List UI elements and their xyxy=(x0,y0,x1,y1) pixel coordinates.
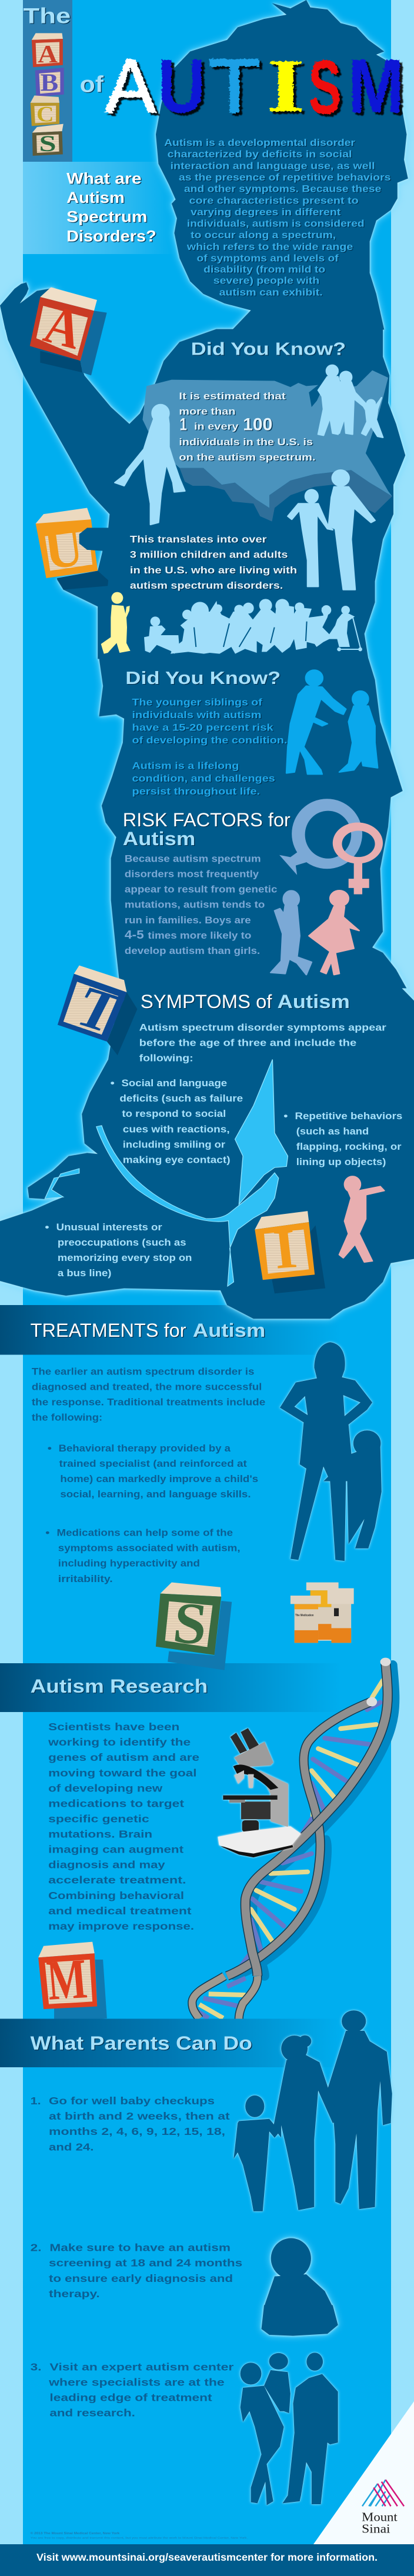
text: medications bullet: Medications can help some of the xyxy=(57,1527,233,1538)
silhouette: pink child xyxy=(339,1176,384,1262)
text: 3 million: autism spectrum disorders. xyxy=(130,580,283,590)
logo: Mount Sinai: Sinai xyxy=(362,2522,390,2535)
text: social and language bullet: • xyxy=(111,1077,115,1089)
text: social and language bullet: cues with reactions, xyxy=(123,1124,230,1134)
text: 1 in every 100: more than xyxy=(179,406,236,416)
text: behavioral therapy bullet: home) can markedly improve a child's xyxy=(60,1473,258,1484)
logo: Mount Sinai xyxy=(362,2480,404,2535)
title: The: The xyxy=(24,4,71,28)
silhouette: siblings xyxy=(286,670,378,774)
silhouette: woman kicking xyxy=(115,405,185,525)
text: siblings and lifelong condition: condition, and challenges xyxy=(132,773,275,784)
copyright text xyxy=(31,2531,248,2540)
text: behavioral therapy bullet: social, learning, and language skills. xyxy=(60,1489,251,1499)
text: symptoms intro: Autism spectrum disorder symptoms appear xyxy=(139,1022,386,1033)
icon: block M xyxy=(38,1942,107,2023)
text: step 2: to ensure early diagnosis and xyxy=(49,2273,233,2284)
block B small xyxy=(35,68,64,97)
text: research paragraph: and medical treatment xyxy=(48,1906,192,1917)
text: risk factors: develop autism than girls. xyxy=(125,945,260,956)
text: step 3 xyxy=(31,2361,233,2419)
heading: what are autism spectrum disorders: Autism xyxy=(66,189,125,206)
heading: what are autism spectrum disorders xyxy=(66,169,156,245)
question band xyxy=(23,162,176,254)
text: 3 million xyxy=(130,533,297,590)
text: research paragraph: genes of autism and are xyxy=(48,1752,199,1764)
text: medications bullet: including hyperactivity and xyxy=(58,1558,200,1569)
hand over block xyxy=(79,528,109,571)
text: 3 million: This translates into over xyxy=(130,533,266,545)
heading: risk factors xyxy=(123,809,291,849)
text: medications bullet: irritability. xyxy=(58,1573,113,1584)
block C small: C xyxy=(36,102,54,126)
icon: block M: M xyxy=(44,1947,89,2012)
child silhouette background xyxy=(0,0,414,1319)
icon: block T: T xyxy=(65,975,132,1045)
title: AUTISM: U xyxy=(158,44,205,129)
title side strip xyxy=(23,0,72,162)
text: autism definition: Autism is a developmental disorder xyxy=(164,137,355,148)
icon: US map xyxy=(142,371,392,522)
text: autism definition: of symptoms and levels of xyxy=(197,253,339,263)
block S small xyxy=(32,124,64,156)
text: step 1: at birth and 2 weeks, then at xyxy=(49,2111,230,2123)
text: step 2: therapy. xyxy=(49,2288,100,2300)
text: social and language bullet xyxy=(111,1077,243,1165)
text: research paragraph: moving toward the goal xyxy=(48,1767,197,1779)
text: risk factors: run in families. Boys are xyxy=(125,915,251,925)
text: unusual interests bullet: a bus line) xyxy=(58,1267,111,1279)
text: 1 in every 100: It is estimated that xyxy=(179,391,286,401)
text: risk factors: disorders most frequently xyxy=(125,869,259,879)
text: medications bullet: • xyxy=(45,1527,49,1538)
text: step 2: screening at 18 and 24 months xyxy=(49,2258,242,2269)
icon: large block A xyxy=(30,287,107,375)
text: step 3: Visit an expert autism center xyxy=(49,2361,233,2373)
silhouette: seated child xyxy=(262,2238,338,2336)
text: siblings and lifelong condition: The younger siblings of xyxy=(132,696,263,708)
silhouette: boy xyxy=(271,890,312,975)
text: autism definition: characterized by deficits in social xyxy=(168,149,352,159)
text: risk factors: mutations, autism tends to xyxy=(125,899,265,910)
text: repetitive behaviors bullet: flapping, rocking, or xyxy=(296,1141,401,1152)
block A small: A xyxy=(38,41,58,68)
text: research paragraph: medications to target xyxy=(48,1798,184,1810)
text: treatments intro: the response. Traditional treatments include xyxy=(32,1397,265,1407)
text: social and language bullet: making eye contact) xyxy=(123,1154,231,1165)
text: autism definition: disability (from mild to xyxy=(203,263,325,275)
icon: block S xyxy=(156,1583,232,1670)
text: step 1: 1. xyxy=(31,2095,41,2107)
logo mark xyxy=(362,2480,404,2506)
text: 3 million: 3 million children and adults xyxy=(130,549,288,560)
text: 1 in every 100 xyxy=(179,391,316,463)
text: unusual interests bullet: preoccupations (such as xyxy=(58,1237,186,1248)
icon: microscope xyxy=(218,1728,301,1857)
text: risk factors: appear to result from genetic xyxy=(125,884,277,895)
text: autism definition: as the presence of repetitive behaviors xyxy=(179,172,391,183)
text: behavioral therapy bullet: trained specialist (and reinforced at xyxy=(59,1458,247,1469)
logo corner triangle xyxy=(313,2401,414,2544)
text: symptoms intro xyxy=(139,1022,386,1063)
text: social and language bullet: deficits (such as failure xyxy=(119,1093,243,1104)
heading: symptoms: Autism xyxy=(277,990,350,1012)
text: treatments intro: diagnosed and treated, the more successful xyxy=(32,1382,262,1392)
icon: large block A: A xyxy=(38,293,88,361)
text: research paragraph: of developing new xyxy=(48,1783,162,1794)
title: AUTISM: A xyxy=(105,44,156,129)
text: research paragraph: Combining behavioral xyxy=(48,1890,184,1901)
text: research paragraph: diagnosis and may xyxy=(48,1860,165,1871)
icon: DNA helix xyxy=(227,1658,395,1976)
text: step 3: and research. xyxy=(49,2407,135,2419)
silhouette: mother and daughter xyxy=(280,1342,382,1561)
text: autism definition: severe) people with xyxy=(213,275,319,286)
icon: block U: U xyxy=(41,515,86,580)
text: autism definition: and other symptoms. Because these xyxy=(184,183,381,194)
heading: risk factors: Autism xyxy=(123,827,195,849)
text: autism definition: individuals, autism is considered xyxy=(187,218,365,229)
text: 1 in every 100: 100 xyxy=(243,415,272,434)
text: siblings and lifelong condition: individuals with autism xyxy=(132,709,262,720)
heading: what parents can do: What Parents Can Do xyxy=(31,2032,252,2054)
text: 1 in every 100: on the autism spectrum. xyxy=(179,452,316,463)
text: step 3: 3. xyxy=(31,2361,41,2373)
silhouette: family walking xyxy=(233,2010,392,2211)
heading: treatments: Autism xyxy=(193,1319,265,1341)
silhouette: couple and child xyxy=(241,2353,338,2505)
text: risk factors: 4-5 xyxy=(125,927,144,941)
text: research paragraph: may improve response. xyxy=(48,1921,194,1932)
icon: block I: I xyxy=(271,1216,300,1281)
heading: risk factors: RISK FACTORS for xyxy=(123,809,291,830)
light gaps in silhouette xyxy=(45,1059,288,1286)
text: step 1: and 24. xyxy=(49,2141,94,2153)
text: research paragraph: mutations. Brain xyxy=(48,1829,152,1840)
text: siblings and lifelong condition: Autism is a lifelong xyxy=(132,760,239,771)
text: risk factors: Because autism spectrum xyxy=(125,853,261,864)
text: repetitive behaviors bullet: Repetitive behaviors xyxy=(295,1110,402,1121)
silhouette: yellow boy xyxy=(101,592,131,654)
text: treatments intro: The earlier an autism spectrum disorder is xyxy=(32,1366,254,1377)
text: repetitive behaviors bullet: (such as hand xyxy=(296,1126,369,1136)
text: 1 in every 100: in every xyxy=(194,421,239,432)
logo: Mount Sinai: Mount xyxy=(362,2510,398,2524)
text: step 3: where specialists are at the xyxy=(48,2377,225,2388)
text: research paragraph: working to identify the xyxy=(48,1737,191,1749)
text: research paragraph: imaging can augment xyxy=(48,1844,183,1856)
text: medications bullet xyxy=(45,1527,241,1584)
text: social and language bullet: Social and language xyxy=(122,1077,227,1089)
text: repetitive behaviors bullet: lining up objects) xyxy=(296,1156,386,1167)
text: autism definition: core characteristics present to xyxy=(189,195,359,206)
text: risk factors xyxy=(125,853,277,956)
text: step 2: 2. xyxy=(31,2243,41,2254)
text: autism definition: varying degrees in different xyxy=(191,206,340,217)
band: treatments xyxy=(0,1305,341,1355)
title: AUTISM: S xyxy=(308,45,342,130)
text: research paragraph: accelerate treatment. xyxy=(48,1875,186,1886)
title: AUTISM: T xyxy=(209,44,260,129)
title: AUTISM xyxy=(105,43,404,130)
band: research xyxy=(0,1663,341,1712)
icon: small alphabet blocks xyxy=(31,33,64,156)
heading: what are autism spectrum disorders: Disorders? xyxy=(66,227,156,245)
text: step 3: leading edge of treatment xyxy=(49,2391,212,2404)
title: AUTISM: I xyxy=(266,43,305,128)
block C small xyxy=(31,95,59,126)
text: treatments intro xyxy=(32,1366,265,1423)
text: social and language bullet: to respond to social xyxy=(122,1108,226,1119)
text: autism definition: to occur along a spectrum, xyxy=(191,229,336,241)
text: autism definition xyxy=(164,137,391,298)
footer bar xyxy=(0,2544,414,2576)
text: repetitive behaviors bullet: • xyxy=(283,1110,288,1121)
text: step 2: Make sure to have an autism xyxy=(49,2243,231,2254)
heading: did you know 2: Did You Know? xyxy=(125,668,281,688)
text: behavioral therapy bullet xyxy=(48,1443,258,1499)
text: repetitive behaviors bullet xyxy=(283,1110,402,1167)
block A small xyxy=(32,33,63,68)
text: symptoms intro: following: xyxy=(139,1053,193,1063)
text: autism definition: which refers to the wide range xyxy=(186,241,353,252)
heading: what are autism spectrum disorders: What are xyxy=(66,169,142,188)
text: research paragraph xyxy=(48,1721,199,1932)
icon: block S: S xyxy=(170,1590,211,1657)
copyright text: © 2013 The Mount Sinai Medical Center, New York xyxy=(31,2531,120,2535)
text: autism definition: autism can exhibit. xyxy=(219,287,323,298)
icon: female symbol xyxy=(333,822,383,895)
text: treatments intro: the following: xyxy=(32,1412,102,1423)
text: step 1: months 2, 4, 6, 9, 12, 15, 18, xyxy=(49,2126,225,2138)
text: social and language bullet: including smiling or xyxy=(123,1139,225,1150)
icon: block I xyxy=(255,1211,325,1293)
copyright text: You are free to copy, distribute and transmit this content, but you must attribute the work to Mount Sinai Medical Center, New York. xyxy=(31,2537,248,2540)
text: siblings and lifelong condition: have a 15-20 percent risk xyxy=(132,722,273,733)
text: 3 million: in the U.S. who are living with xyxy=(130,565,297,575)
text: unusual interests bullet: memorizing every stop on xyxy=(58,1252,192,1263)
text: 1 in every 100: 1 xyxy=(179,415,187,434)
block B small: B xyxy=(41,69,58,96)
heading: symptoms: SYMPTOMS of xyxy=(141,990,272,1012)
text: step 2 xyxy=(31,2243,242,2300)
text: risk factors: times more likely to xyxy=(148,930,251,940)
icon: medicine bottles: The Medication xyxy=(295,1614,313,1617)
band: parents xyxy=(0,2018,341,2067)
text: 1 in every 100: individuals in the U.S. is xyxy=(179,436,313,448)
text: siblings and lifelong condition xyxy=(132,696,288,796)
text: siblings and lifelong condition: of developing the condition. xyxy=(132,735,288,745)
text: behavioral therapy bullet: • xyxy=(48,1443,52,1453)
heading: treatments: TREATMENTS for xyxy=(31,1319,186,1341)
silhouette: girl xyxy=(309,890,359,975)
text: siblings and lifelong condition: persist throughout life. xyxy=(132,786,260,796)
text: medications bullet: symptoms associated with autism, xyxy=(58,1543,241,1553)
text: unusual interests bullet: • xyxy=(45,1222,49,1232)
icon: block U xyxy=(36,508,109,590)
silhouette: family on map xyxy=(318,365,383,438)
icon: medicine bottles xyxy=(291,1583,354,1643)
heading: autism research: Autism Research xyxy=(31,1675,208,1697)
text: step 1 xyxy=(31,2095,230,2153)
heading: what are autism spectrum disorders: Spectrum xyxy=(66,208,148,226)
silhouette: row of children xyxy=(144,599,362,654)
silhouette: woman and girl holding hands xyxy=(288,470,375,590)
text: behavioral therapy bullet: Behavioral therapy provided by a xyxy=(59,1443,231,1453)
icon: DNA helix lower xyxy=(192,1976,258,2018)
text: unusual interests bullet xyxy=(45,1222,192,1279)
text: research paragraph: Scientists have been xyxy=(48,1721,179,1733)
icon: male symbol xyxy=(279,799,362,875)
text: unusual interests bullet: Unusual interests or xyxy=(56,1222,162,1232)
text: symptoms intro: before the age of three and include the xyxy=(139,1037,356,1048)
block S small: S xyxy=(39,131,56,156)
heading: did you know 1: Did You Know? xyxy=(191,339,346,359)
text: research paragraph: specific genetic xyxy=(48,1813,149,1825)
text: step 1: Go for well baby checkups xyxy=(49,2095,215,2107)
text: autism definition: interaction and language use, as well xyxy=(171,160,375,171)
title: of: of xyxy=(80,72,103,97)
